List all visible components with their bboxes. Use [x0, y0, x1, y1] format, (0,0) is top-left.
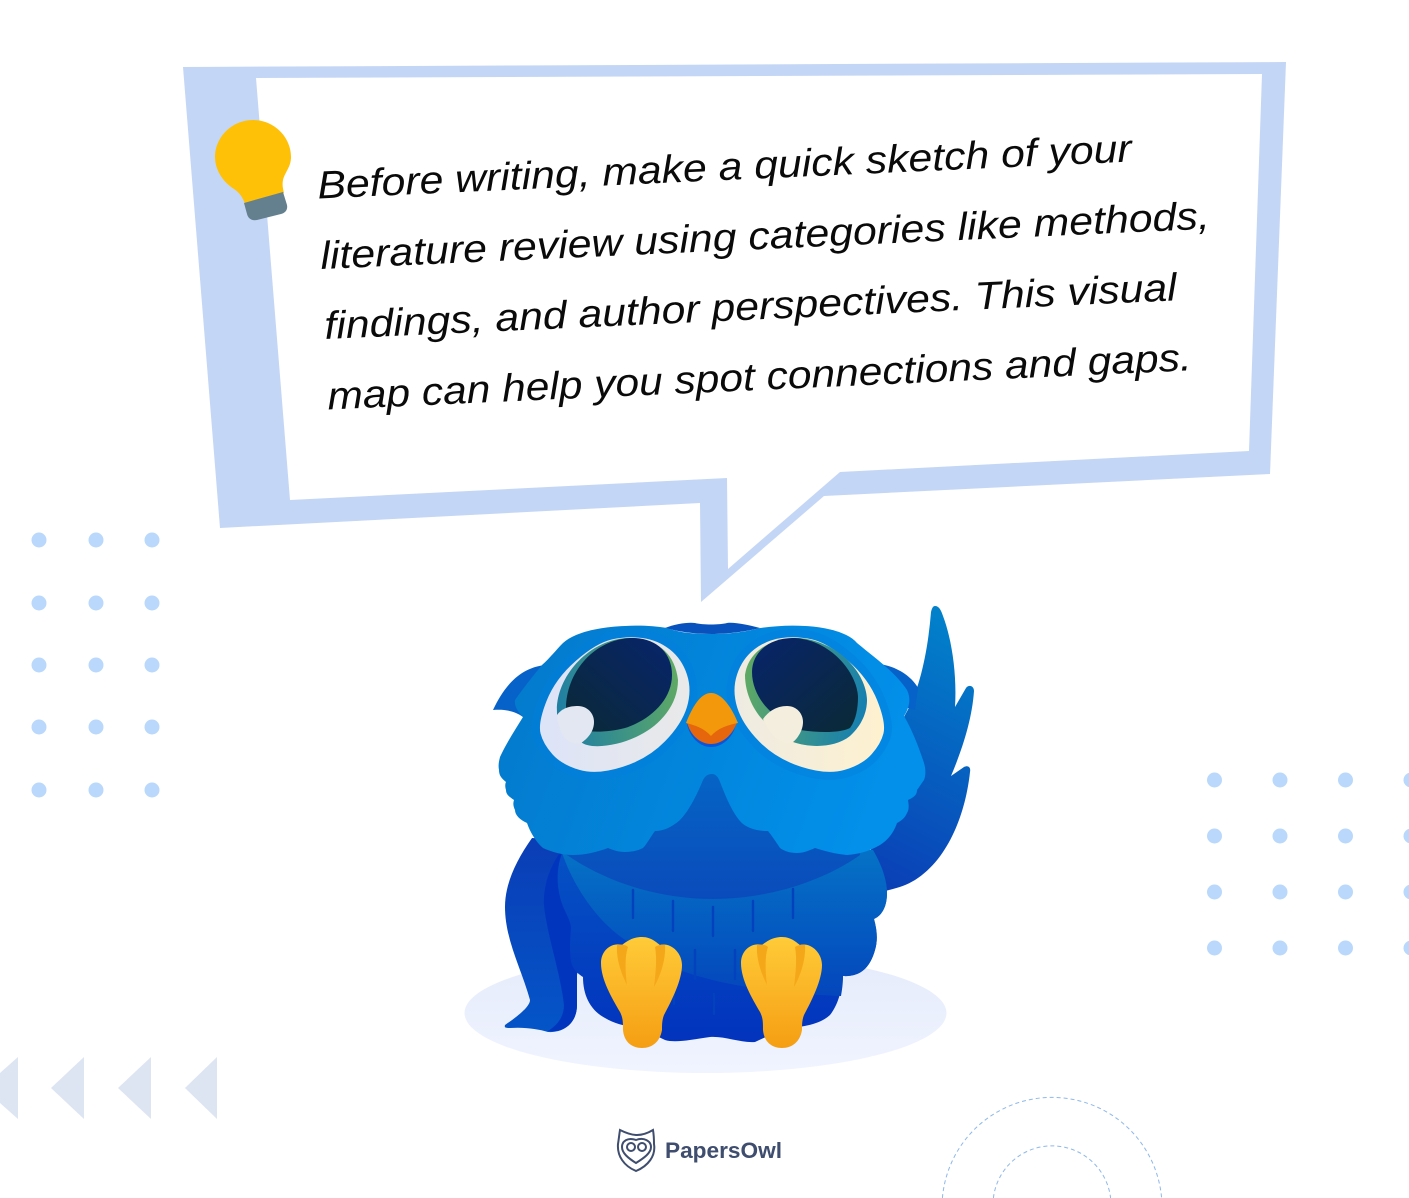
icon: owl logo: [618, 1130, 654, 1171]
left wing: [505, 838, 590, 1032]
left eye: [542, 638, 688, 770]
tip text: literature review using categories like methods,: [319, 195, 1210, 278]
tip text: map can help you spot connections and gaps.: [326, 336, 1193, 418]
left ear: [493, 665, 560, 717]
tip text: Before writing, make a quick sketch of your: [316, 127, 1135, 207]
logo wordmark: PapersOwl: [665, 1138, 782, 1163]
tip text: [316, 127, 1210, 418]
owl mascot: [493, 606, 974, 1048]
chest feather marks: [633, 889, 793, 1014]
dot grid: left: [32, 532, 160, 798]
ground shadow: [464, 953, 946, 1073]
icon: light bulb: [215, 120, 291, 220]
left wing inner band: [544, 850, 585, 1031]
logo: PapersOwl: [618, 1130, 782, 1171]
right eye: [736, 638, 882, 770]
tail feathers: [860, 606, 974, 892]
neck: [560, 765, 860, 899]
speech bubble: [183, 62, 1286, 602]
body: [558, 850, 887, 1042]
head tuft: [665, 623, 760, 634]
right foot: [741, 937, 822, 1048]
dot grid: right: [1207, 772, 1409, 956]
tip text: findings, and author perspectives. This visual: [323, 266, 1179, 348]
left-pointing triangles: [0, 1057, 217, 1119]
dashed concentric arcs: [942, 1097, 1162, 1198]
chest: [562, 850, 887, 996]
left foot: [601, 937, 682, 1048]
beak: [686, 693, 738, 747]
head mask: [499, 626, 925, 855]
right ear: [880, 664, 918, 710]
